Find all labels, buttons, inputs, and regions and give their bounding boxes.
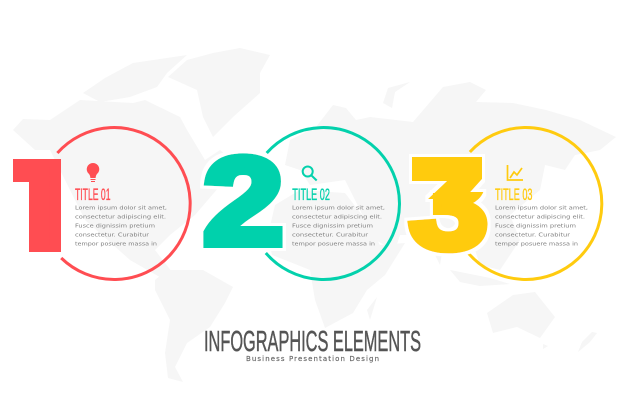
icon: light bulb [87, 163, 99, 182]
panel: step 3 [409, 127, 602, 279]
text block: step 1: Lorem ipsum dolor sit amet, [75, 206, 167, 212]
text block: step 1 [75, 206, 167, 248]
title 02: TITLE 02 [292, 186, 330, 204]
icon: line chart [508, 165, 523, 180]
text block: step 3: consectetur. Curabitur [495, 232, 571, 238]
panel: step 1 [0, 128, 190, 281]
number 3: 3 [409, 135, 488, 275]
text block: step 3 [495, 206, 588, 248]
ring: step 2 [266, 128, 399, 280]
text block: step 1: consectetur adipiscing elit. [75, 214, 166, 220]
icon: magnifier [303, 166, 317, 180]
text block: step 2: consectetur adipiscing elit. [292, 214, 382, 220]
text block: step 1: tempor posuere massa in [75, 242, 158, 248]
text block: step 1: Fusce dignissim pretium [75, 224, 155, 230]
title 03: TITLE 03 [495, 186, 532, 204]
text block: step 2 [292, 206, 385, 248]
number 1 [13, 159, 61, 252]
ring: step 1 [57, 128, 190, 280]
subheading: Business Presentation Design [246, 355, 379, 363]
text block: step 2: tempor posuere massa in [292, 242, 376, 248]
text block: step 1: consectetur. Curabitur [75, 232, 150, 238]
text block: step 3: tempor posuere massa in [495, 242, 579, 248]
ring: step 3 [468, 127, 602, 279]
text block: step 3: Fusce dignissim pretium [495, 224, 576, 230]
text block: step 2: Fusce dignissim pretium [292, 224, 373, 230]
text block: step 2: Lorem ipsum dolor sit amet, [292, 206, 385, 212]
number 3 [404, 154, 490, 256]
text block: step 3: Lorem ipsum dolor sit amet, [495, 206, 588, 212]
panel: step 2 [203, 128, 399, 280]
text block: step 2: consectetur. Curabitur [292, 232, 369, 238]
heading: INFOGRAPHICS ELEMENTS [204, 326, 421, 358]
world map background [13, 48, 616, 382]
text block: step 3: consectetur adipiscing elit. [495, 214, 585, 220]
title 01: TITLE 01 [75, 186, 110, 204]
number 2: 2 [203, 132, 284, 271]
